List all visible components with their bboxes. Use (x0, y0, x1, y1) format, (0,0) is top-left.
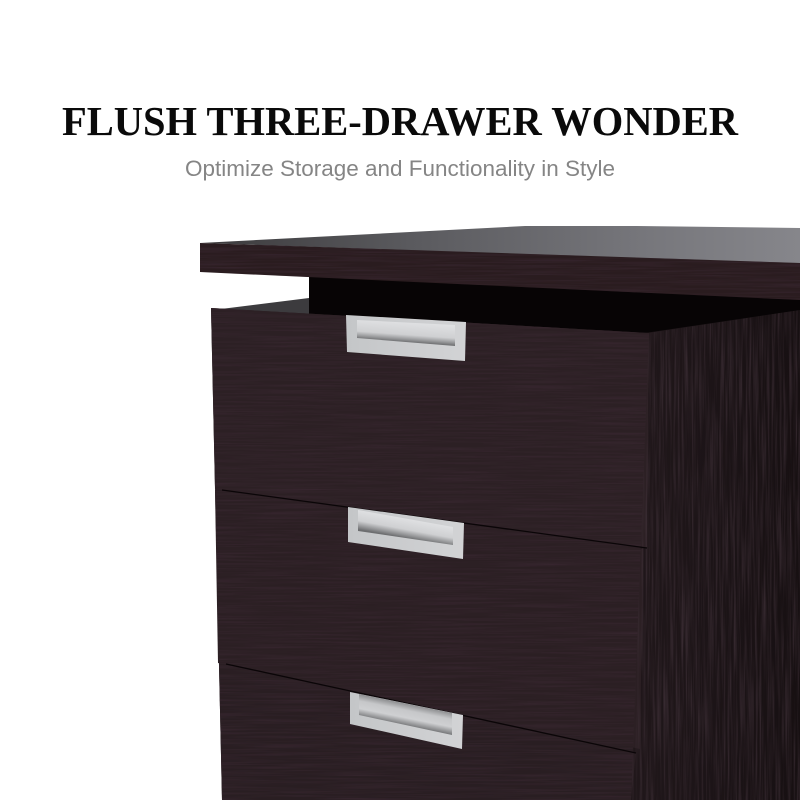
wood grain on fronts (195, 240, 800, 800)
drawer top surface (221, 298, 309, 316)
desk side panel (628, 310, 800, 800)
wood grain on side (625, 305, 800, 800)
bottom drawer front (219, 664, 636, 800)
subtitle: Optimize Storage and Functionality in Style (185, 156, 615, 181)
top drawer front (211, 308, 649, 548)
tabletop edge (200, 243, 800, 300)
desk top surface (200, 226, 800, 264)
handle: top drawer (346, 315, 466, 361)
drawer gap lines (222, 490, 647, 753)
infographic canvas (62, 108, 800, 800)
desk illustration (195, 226, 800, 800)
handle: middle drawer (348, 507, 464, 559)
cabinet backing (211, 308, 649, 800)
desk cabinet recess (309, 274, 800, 336)
middle drawer front (215, 490, 643, 749)
handle: bottom drawer (350, 692, 463, 749)
title: FLUSH THREE-DRAWER WONDER (62, 98, 738, 144)
